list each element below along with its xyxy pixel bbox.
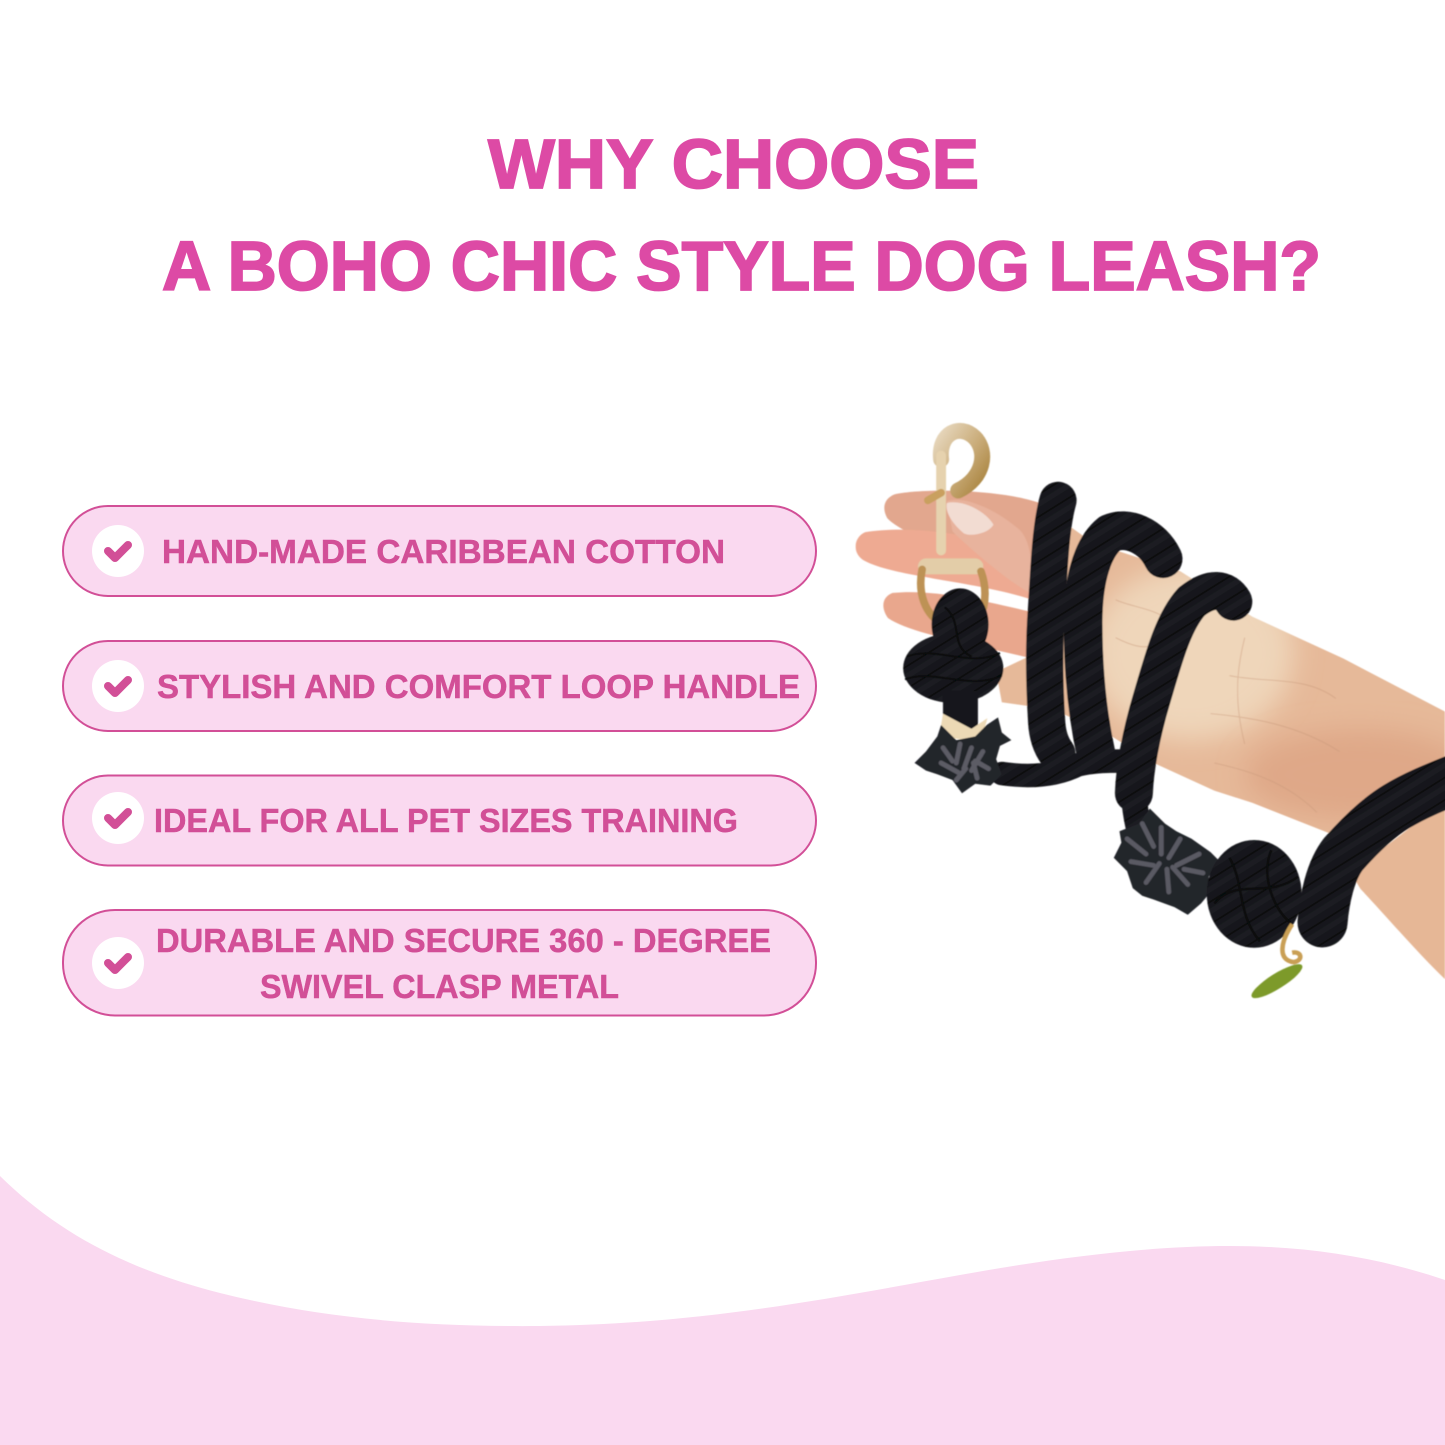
lower forearm xyxy=(1351,801,1445,979)
metal swivel clasp xyxy=(921,431,985,626)
photo: hand holding black rope leash xyxy=(856,431,1445,1003)
panel: benefit 3: IDEAL FOR ALL PET SIZES TRAINING xyxy=(154,802,738,839)
rope strand right xyxy=(1134,591,1233,793)
panel: benefit 4: SWIVEL CLASP METAL xyxy=(260,968,619,1005)
title: WHY CHOOSE xyxy=(488,125,979,203)
top finger xyxy=(884,491,1063,592)
title: A BOHO CHIC STYLE DOG LEASH? xyxy=(162,227,1321,305)
bottom wave xyxy=(0,1176,1445,1445)
ring finger xyxy=(883,592,1036,659)
panel: benefit 2: STYLISH AND COMFORT LOOP HANDLE xyxy=(157,668,800,705)
rope strand middle xyxy=(1083,531,1163,753)
bottom knot xyxy=(1207,840,1302,948)
tassel left xyxy=(915,714,1011,793)
metal tag xyxy=(1248,924,1306,1003)
rope strand tail xyxy=(1134,790,1140,835)
title xyxy=(162,125,1321,305)
panel: benefit 4 xyxy=(63,910,816,1016)
middle finger xyxy=(856,530,1032,600)
thumb xyxy=(947,500,1031,592)
forearm and palm xyxy=(997,527,1445,834)
top knot xyxy=(903,588,1003,729)
hand and arm xyxy=(856,491,1445,979)
panel: benefit 2 xyxy=(63,641,816,731)
thumbnail xyxy=(946,502,993,535)
panel: benefit 4: DURABLE AND SECURE 360 - DEGREE xyxy=(156,922,771,959)
rope strand left xyxy=(1045,500,1058,753)
panel: benefit 1 xyxy=(63,506,816,596)
panel: benefit 3 xyxy=(63,776,816,866)
panel: benefit 1: HAND-MADE CARIBBEAN COTTON xyxy=(162,533,725,570)
rope bottom connector xyxy=(1002,761,1123,776)
tassel right xyxy=(1114,808,1220,915)
rope loop on arm xyxy=(1322,780,1445,922)
